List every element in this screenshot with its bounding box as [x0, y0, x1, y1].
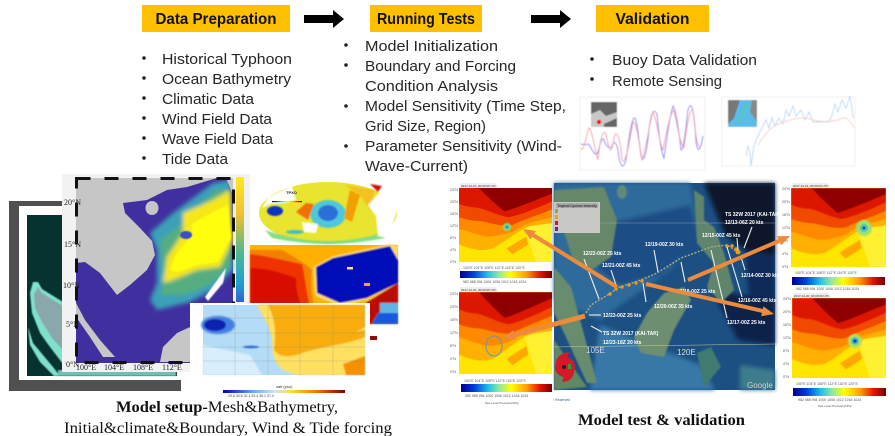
bullet list: data preparation: Ocean Bathymetry — [162, 71, 292, 88]
track date labels: 12/15-00Z 45 kts — [702, 233, 741, 239]
reserved note: ‹ Reserved — [553, 398, 570, 402]
lat and lon labels: 20°N — [64, 198, 81, 207]
lat and lon labels: 108°E — [133, 363, 153, 372]
pressure panel: 2017-12-20: 100°E 104°E 108°E 112°E 116°E 120°E — [796, 382, 858, 386]
lat and lon labels: 5°N — [66, 320, 79, 329]
bullet list: data preparation: Historical Typhoon — [162, 51, 292, 68]
track date labels: 12/23-18Z 20 kts — [603, 340, 642, 346]
bullet list: running tests: Model Sensitivity (Time Step, — [365, 98, 566, 115]
track date labels: TS 32W 2017 (KAI-TAK) — [603, 331, 659, 337]
colorbar: salinity: 29.6 30.8 32.1 33.4 35.1 37.4 — [228, 394, 274, 398]
pressure panel: 2017-12-22: 2017-12-22_00:00:00 UTC — [461, 288, 498, 292]
pressure panel: 2017-12-20: 24°N — [783, 297, 791, 301]
pressure panel: 2017-12-19: 24°N — [782, 187, 790, 191]
pressure panel: 2017-12-21: 2017-12-21_00:00:00 UTC — [461, 184, 498, 188]
pressure panel: 2017-12-21: 16°N — [450, 212, 458, 216]
pressure panel: 2017-12-19: 4°N — [782, 252, 788, 256]
header: Data Preparation: Data Preparation — [156, 11, 276, 28]
lat and lon labels: 100°E — [76, 363, 96, 372]
header: Data Preparation — [142, 5, 290, 32]
track date labels: 120E — [677, 348, 696, 357]
arrow: preparation to tests — [304, 10, 344, 28]
pressure panel: 2017-12-20: 20°N — [783, 310, 791, 314]
chart: salinity section — [190, 303, 377, 380]
track date labels: 12/14-00Z 30 kts — [741, 273, 780, 279]
bullet list: running tests: Boundary and Forcing — [365, 58, 516, 75]
pressure panel: 2017-12-22: 20°N — [450, 305, 458, 309]
track date labels: 12/19-00Z 30 kts — [645, 242, 684, 248]
legend: cyclone intensity — [554, 202, 600, 233]
lat and lon labels — [63, 198, 182, 372]
pressure panel: 2017-12-20: Sea Level Pressure(hPa) — [818, 404, 852, 408]
pressure panel: 2017-12-21: 12°N — [450, 224, 458, 228]
pressure panel: 2017-12-20: 2017-12-20_00:00:00 UTC — [794, 294, 831, 298]
lat and lon labels: 104°E — [104, 363, 124, 372]
pressure panel: 2017-12-19: 16°N — [782, 213, 790, 217]
pressure panel: 2017-12-20: 0°N — [783, 375, 789, 379]
track date labels: TS 32W 2017 (KAI-TAK) — [725, 212, 781, 218]
bullet list: data preparation: Wind Field Data — [162, 111, 273, 128]
track date labels: Google — [747, 381, 773, 390]
pressure panel: 2017-12-19: 0°N — [782, 265, 788, 269]
pressure panel: 2017-12-21 — [450, 183, 552, 284]
colorbar: salinity — [223, 384, 345, 398]
pressure panel: 2017-12-22: Sea Level Pressure(hPa) — [485, 401, 519, 405]
bullet list: running tests: Parameter Sensitivity (Wind- — [365, 138, 562, 155]
bullet list: validation: Buoy Data Validation — [612, 52, 757, 69]
pressure panel: 2017-12-22: 0°N — [450, 370, 456, 374]
pressure panel: 2017-12-20: 8°N — [783, 349, 789, 353]
pressure panel: 2017-12-22: 982 988 994 1000 1006 1012 1018 1024 — [465, 394, 528, 398]
land areas — [76, 178, 233, 362]
header: Validation: Validation — [616, 11, 690, 28]
caption: model setup: Model setup-Mesh&Bathymetry, — [116, 399, 338, 416]
track callout lines — [584, 227, 752, 332]
arrow: track to 12-20 panel — [646, 284, 774, 316]
track date labels: 12/13-06Z 20 kts — [725, 220, 764, 226]
pressure panel: 2017-12-19: 982 988 994 1000 1006 1012 1018 1024 — [796, 287, 859, 291]
track date labels — [583, 212, 781, 390]
track date labels: 12/21-00Z 45 kts — [602, 263, 641, 269]
pressure panel: 2017-12-21: 8°N — [450, 236, 456, 240]
chart: buoy time series — [580, 97, 705, 170]
track date labels: 12/20-00Z 35 kts — [654, 304, 693, 310]
pressure panel: 2017-12-21: 20°N — [450, 200, 458, 204]
pressure panel: 2017-12-20: 982 988 994 1000 1006 1012 1018 1024 — [798, 398, 861, 402]
bullet list: data preparation: Wave Field Data — [162, 131, 274, 148]
pressure panel: 2017-12-19: 8°N — [782, 239, 788, 243]
pressure panel: 2017-12-22: 4°N — [450, 357, 456, 361]
pressure panel: 2017-12-19: 100°E 104°E 108°E 112°E 116°E 120°E — [795, 271, 857, 275]
header: Validation — [596, 5, 709, 32]
pressure panel: 2017-12-22: 16°N — [450, 318, 458, 322]
bullet list: running tests: Model Initialization — [365, 38, 498, 55]
pressure panel: 2017-12-20: 4°N — [783, 362, 789, 366]
pressure panel: 2017-12-22: 24°N — [450, 292, 458, 296]
bullet list: running tests — [344, 38, 566, 175]
pressure panel: 2017-12-22: 8°N — [450, 344, 456, 348]
pressure panel: 2017-12-22: 12°N — [450, 331, 458, 335]
bullet list: data preparation — [142, 51, 292, 168]
legend: cyclone intensity: Tropical Cyclone Intensity — [557, 204, 597, 208]
bullet list: validation — [590, 52, 757, 90]
bullet list: running tests: Condition Analysis — [365, 78, 498, 95]
lat and lon labels: 15°N — [64, 240, 81, 249]
lat and lon labels: 112°E — [162, 363, 182, 372]
pressure panel: 2017-12-20 — [783, 293, 886, 408]
track line and markers — [586, 244, 740, 313]
pressure panel: 2017-12-19 — [782, 183, 886, 291]
arrow: track to 12-22 panel — [503, 316, 585, 340]
pressure panel: 2017-12-20: 12°N — [783, 336, 791, 340]
bullet list: running tests: Wave-Current) — [365, 158, 468, 175]
bullet list: running tests: Grid Size, Region) — [365, 118, 486, 135]
colorbar: salinity: salt (psu) — [276, 384, 293, 389]
map: global tide model — [259, 182, 398, 244]
pressure panel: 2017-12-21: 0°N — [450, 260, 456, 264]
chart: wave height time series — [722, 96, 855, 166]
map: red and blue surface field — [250, 244, 398, 324]
header: Running Tests — [370, 5, 482, 32]
track date labels: 12/18-00Z 25 kts — [677, 289, 716, 295]
track date labels: 12/16-00Z 45 kts — [738, 298, 777, 304]
pressure panel: 2017-12-19: 20°N — [782, 200, 790, 204]
pressure panel: 2017-12-22 — [450, 287, 552, 405]
track date labels: 12/23-00Z 25 kts — [603, 313, 642, 319]
pressure panel: 2017-12-21: 24°N — [450, 188, 458, 192]
arrow: track to 12-21 panel — [523, 229, 617, 287]
pressure panel: 2017-12-20: 16°N — [783, 323, 791, 327]
map: typhoon track satellite — [554, 183, 781, 390]
track date labels: 12/17-00Z 25 kts — [727, 320, 766, 326]
pressure panel: 2017-12-22: 100°E 104°E 108°E 112°E 116°E 120°E — [464, 379, 526, 383]
track date labels: 105E — [586, 346, 605, 355]
pressure panel: 2017-12-21: 4°N — [450, 248, 456, 252]
lat and lon labels: 0°N — [66, 360, 79, 369]
icon: hurricane logo — [555, 352, 575, 382]
map: global tide model: TPXO — [286, 190, 297, 195]
pressure panel: 2017-12-19: 2017-12-19_00:00:00 UTC — [793, 184, 830, 188]
pressure panel: 2017-12-21: 100°E 104°E 108°E 112°E 116°E 120°E — [463, 266, 525, 270]
pressure panel: 2017-12-21: 982 988 994 1000 1006 1012 1018 1024 — [463, 280, 526, 284]
caption: model test and validation: Model test & validation — [578, 412, 745, 429]
header: Running Tests: Running Tests — [377, 11, 475, 28]
bullet list: data preparation: Tide Data — [162, 151, 229, 168]
pressure panel: 2017-12-19: 12°N — [782, 226, 790, 230]
bullet list: validation: Remote Sensing — [612, 73, 722, 90]
arrow: tests to validation — [531, 10, 571, 28]
map: dark mesh grid panel — [9, 201, 181, 391]
bullet list: data preparation: Climatic Data — [162, 91, 255, 108]
caption: model setup — [64, 399, 392, 436]
arrow: track to 12-19 panel — [688, 236, 790, 280]
map: South China Sea bathymetry — [62, 174, 250, 372]
lat and lon labels: 10°N — [63, 281, 80, 290]
track date labels: 12/22-00Z 25 kts — [583, 251, 622, 257]
